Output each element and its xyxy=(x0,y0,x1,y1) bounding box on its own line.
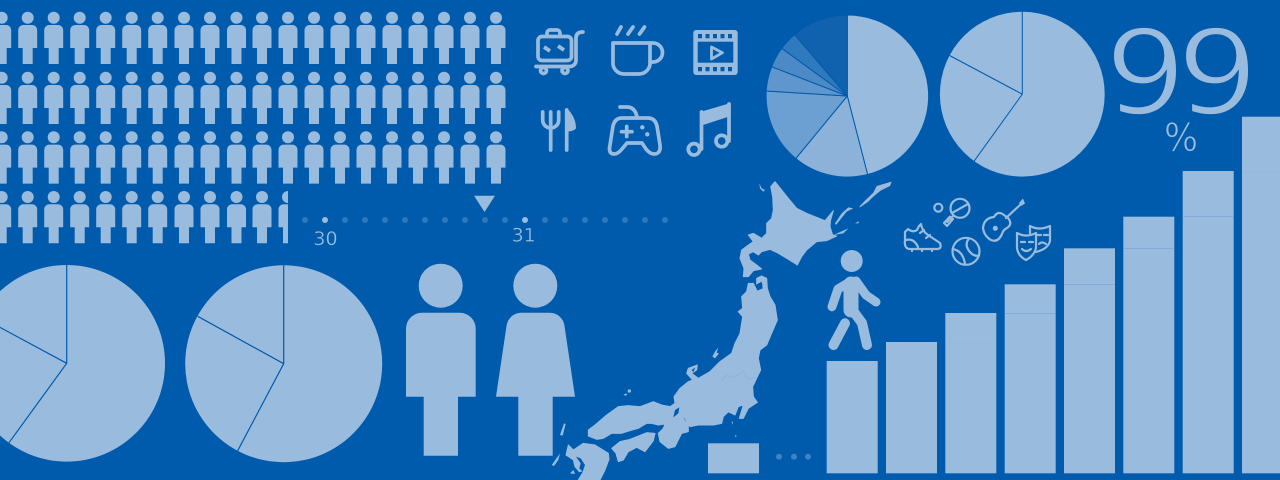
label 31: 31 xyxy=(512,225,536,247)
pie chart: bottom centre xyxy=(185,265,382,462)
highlighted dots xyxy=(322,217,528,223)
icon: fork and knife xyxy=(543,108,576,150)
icon: theatre masks xyxy=(1017,226,1050,260)
icons: man and woman xyxy=(406,264,575,456)
label 30: 30 xyxy=(313,228,338,250)
segment 6 xyxy=(782,35,847,96)
icon: running shoe xyxy=(905,224,941,251)
icon: baseball xyxy=(952,238,980,265)
bar 3 xyxy=(945,313,996,473)
continuation dots xyxy=(776,454,811,460)
icon: luggage cart xyxy=(536,30,583,74)
people row 4, partial xyxy=(0,191,297,243)
small islands xyxy=(552,347,737,474)
pie chart: top right xyxy=(940,12,1105,177)
icon: music notes xyxy=(688,103,731,155)
Shikoku xyxy=(612,433,655,462)
Hokkaido xyxy=(740,182,837,277)
timeline dots xyxy=(302,217,668,223)
icon grid: leisure activities xyxy=(536,27,738,155)
pie chart: bottom left xyxy=(0,265,165,462)
bar 4 xyxy=(1005,284,1056,473)
small bar xyxy=(708,443,759,473)
icon: walking person xyxy=(832,250,876,345)
Honshu xyxy=(588,276,777,448)
bar 8 xyxy=(1242,117,1280,473)
people row 2 xyxy=(0,72,505,124)
Kuril islands xyxy=(759,182,892,235)
icon: coffee cup xyxy=(613,27,662,74)
bar 5 xyxy=(1064,248,1115,473)
map of Japan xyxy=(552,182,892,480)
lakes and bays xyxy=(576,282,763,472)
timeline: dotted age scale xyxy=(302,196,668,250)
segment 4 xyxy=(766,67,847,96)
bar 7 xyxy=(1183,171,1234,473)
Kyushu xyxy=(566,443,609,480)
bar chart: rising steps xyxy=(827,117,1280,473)
segment 2 xyxy=(796,96,868,177)
icon: game controller xyxy=(610,107,660,154)
pictogram: rows of people xyxy=(0,12,505,243)
prefectural border traces xyxy=(722,372,757,381)
bar 2 xyxy=(886,342,937,473)
segment 5 xyxy=(772,48,847,96)
big number 99: 99 xyxy=(1104,6,1259,143)
people row 1 xyxy=(0,12,505,64)
segment 7 xyxy=(795,15,847,96)
bar 1 xyxy=(827,361,878,473)
percent sign: % xyxy=(1164,115,1198,160)
pie chart: multi-segment xyxy=(766,15,929,177)
people row 3 xyxy=(0,131,505,184)
icon: table tennis paddle and ball xyxy=(934,199,970,226)
bar 6 xyxy=(1123,217,1174,473)
icon: woman xyxy=(496,264,575,456)
marker triangle xyxy=(474,196,495,212)
icon: film strip xyxy=(693,30,738,75)
segment 1 xyxy=(847,15,929,174)
icon: acoustic guitar xyxy=(983,198,1025,241)
icons: hobbies xyxy=(905,198,1050,265)
small bar with dots xyxy=(708,443,811,473)
segment 3 xyxy=(766,91,847,158)
icon: man xyxy=(406,264,476,456)
